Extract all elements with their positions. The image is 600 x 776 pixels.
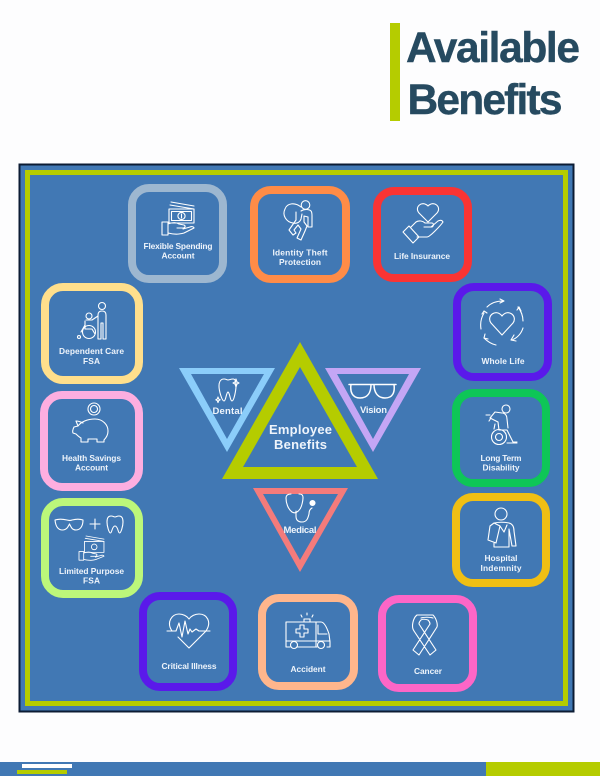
- icon: ambulance: [286, 613, 330, 648]
- card: health savings account: Account: [75, 462, 108, 472]
- card: long term disability: [456, 393, 546, 483]
- icon: money in hand: [162, 202, 194, 235]
- icon: thief with sack: [284, 201, 312, 240]
- card: limited purpose fsa: Limited Purpose: [59, 566, 124, 576]
- card: accident: [262, 598, 354, 686]
- triangle: medical: [253, 488, 348, 572]
- icon: glasses: [349, 384, 396, 398]
- triangle: employee benefits: Benefits: [274, 437, 327, 452]
- card: dependent care fsa: Dependent Care: [59, 346, 124, 356]
- triangle: vision: Vision: [360, 405, 387, 416]
- triangle: employee benefits: [222, 342, 378, 479]
- card: whole life: Whole Life: [482, 356, 525, 366]
- card: hospital indemnity: Hospital: [484, 553, 518, 563]
- icon: stethoscope: [286, 494, 315, 522]
- icon: awareness ribbon: [413, 615, 437, 655]
- card: cancer: Cancer: [414, 666, 443, 676]
- card: flexible spending account: Account: [162, 250, 195, 260]
- panel: employee benefits diagram: [20, 164, 574, 712]
- title: [390, 23, 580, 124]
- icon: caregiver and wheelchair: [78, 302, 106, 339]
- card: long term disability: Disability: [482, 462, 520, 472]
- triangle: dental: Dental: [212, 406, 242, 417]
- card: long term disability: Long Term: [480, 453, 522, 463]
- card: health savings account: [44, 395, 139, 487]
- card: dependent care fsa: [45, 287, 139, 380]
- icon: heart with pulse: [167, 614, 210, 648]
- card: accident: Accident: [290, 664, 326, 674]
- icon: glasses plus tooth plus money: [55, 516, 123, 560]
- card: whole life: [457, 287, 548, 377]
- card: life insurance: Life Insurance: [394, 251, 450, 261]
- card: identity theft protection: [254, 190, 346, 279]
- triangle: employee benefits: Employee: [269, 422, 332, 437]
- card: hospital indemnity: [456, 497, 546, 583]
- footer band: [0, 762, 600, 776]
- card: cancer: [382, 599, 473, 688]
- title: Available: [406, 25, 580, 72]
- card: limited purpose fsa: FSA: [83, 576, 100, 586]
- card: identity theft protection: Protection: [279, 257, 321, 267]
- card: identity theft protection: Identity Theft: [272, 248, 328, 258]
- card: health savings account: Health Savings: [62, 453, 121, 463]
- title: Benefits: [408, 77, 562, 124]
- icon: heart in circular arrows: [481, 299, 523, 345]
- card: flexible spending account: [132, 188, 223, 279]
- triangle: medical: Medical: [284, 525, 316, 536]
- card: flexible spending account: Flexible Spending: [144, 241, 212, 251]
- icon: person with arm sling: [488, 508, 516, 547]
- card: critical illness: [143, 596, 233, 687]
- icon: tooth: [216, 379, 239, 403]
- triangle: vision: [325, 368, 421, 452]
- card: life insurance: [377, 191, 468, 278]
- card: dependent care fsa: FSA: [83, 356, 100, 366]
- card: critical illness: Critical Illness: [162, 661, 217, 671]
- icon: person in wheelchair: [486, 405, 517, 444]
- card: hospital indemnity: Indemnity: [480, 563, 522, 573]
- card: limited purpose fsa: [45, 502, 139, 594]
- icon: piggy bank: [73, 403, 108, 442]
- icon: heart on hand: [403, 204, 443, 243]
- triangle: dental: [179, 368, 275, 452]
